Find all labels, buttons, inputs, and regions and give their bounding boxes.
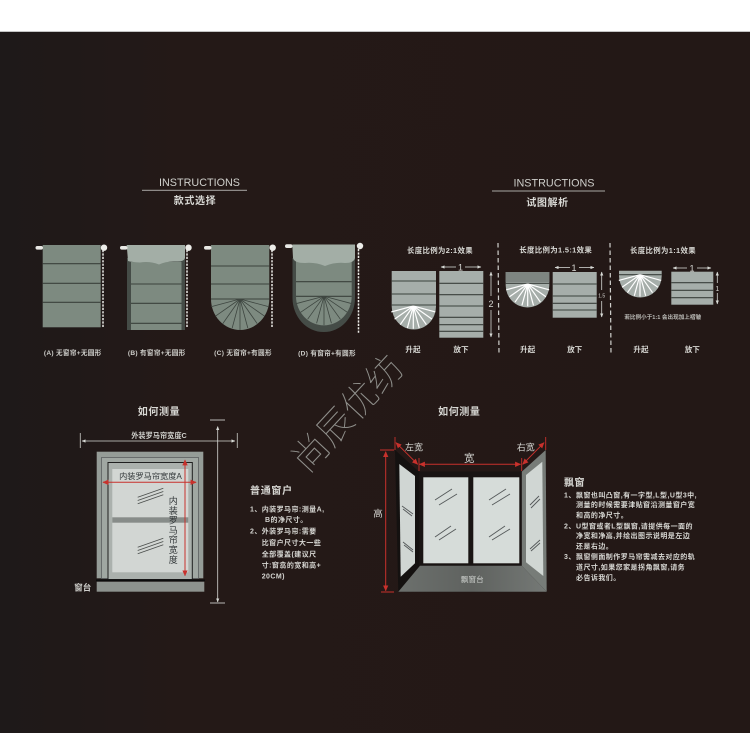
text block: bay window notes: 2、	[564, 524, 576, 530]
outer width dimension: 外装罗马帘宽度C	[131, 431, 187, 440]
text block: bay window notes: 3、	[564, 554, 576, 561]
panel: style A	[36, 244, 107, 328]
text block: standard window notes: 外装罗马帘:需要	[262, 527, 317, 536]
style captions: (C) 无窗帘+有圆形	[214, 348, 272, 357]
window sill	[74, 580, 205, 592]
panel: ratio 1:1	[619, 246, 719, 354]
inner height label: 帘	[169, 534, 178, 545]
inner height label: 马	[169, 525, 178, 535]
text block: bay window notes: 和高的净尺寸。	[576, 510, 628, 520]
text block: standard window notes	[250, 484, 325, 581]
text block: standard window notes: 普通窗户	[250, 484, 293, 497]
text block: standard window notes: 比窗户尺寸大一些	[262, 538, 321, 547]
heading: how to measure, bay window: 如何测量	[438, 405, 481, 418]
panel: ratio 2:1: 放下	[453, 344, 469, 354]
red measure lines	[380, 437, 546, 592]
panel: ratio 1:1: 升起	[633, 344, 649, 354]
inner height label: 度	[169, 554, 178, 565]
panel: ratio 1.5:1: 1	[571, 263, 577, 273]
style captions: (A) 无窗帘+无圆形	[44, 348, 102, 357]
style captions	[44, 348, 356, 358]
glass reflections	[402, 489, 540, 552]
panel: ratio 1:1: 1	[689, 263, 695, 273]
panel: ratio 1:1: 放下	[685, 344, 700, 354]
outer width dimension	[80, 431, 237, 448]
inner height label: 罗	[169, 516, 178, 526]
panel: ratio 1.5:1: 升起	[520, 344, 536, 354]
text block: bay window notes: 飘窗也叫凸窗,有一字型,L型,U型3中,	[576, 490, 697, 500]
measure labels: 宽	[464, 452, 475, 464]
inner width label: 内装罗马帘宽度A	[119, 471, 182, 481]
text block: bay window notes	[564, 476, 697, 582]
inner height label: 内	[169, 495, 178, 506]
measure labels: 右宽	[517, 441, 535, 452]
watermark: 尚辰优纺	[277, 341, 414, 482]
diagram: standard window	[74, 420, 237, 603]
measure labels	[373, 441, 535, 520]
column dividers	[498, 243, 611, 355]
inner height label: 宽	[169, 544, 178, 555]
panel: ratio 2:1: 2	[488, 299, 494, 309]
text block: standard window notes: 20CM)	[262, 574, 285, 581]
panel: ratio 1:1: 1	[715, 286, 719, 293]
text block: bay window notes: 还是右边。	[576, 542, 613, 550]
panel: ratio 1.5:1: 长度比例为1.5:1效果	[519, 246, 592, 254]
inner height label: 装	[169, 505, 178, 516]
heading: style selection: 款式选择	[174, 194, 216, 207]
centre glass panes	[423, 477, 519, 563]
window frame and glass	[97, 452, 203, 580]
heading: diagram explanation: 试图解析	[526, 196, 569, 209]
panel: style D	[285, 243, 363, 334]
sill label: 飘窗台	[461, 574, 484, 584]
heading: diagram explanation: INSTRUCTIONS	[514, 177, 594, 189]
measure labels: 左宽	[405, 442, 423, 452]
panel: ratio 1.5:1	[506, 246, 605, 354]
panel: style C	[204, 244, 276, 330]
panel: ratio 1:1: 长度比例为1:1效果	[630, 246, 696, 255]
measure labels: 高	[373, 508, 383, 520]
text block: bay window notes: 飘窗	[564, 476, 585, 489]
heading: style selection	[142, 177, 247, 207]
text block: bay window notes: 飘窗侧面制作罗马帘需减去对应的轨	[576, 552, 695, 561]
window walls	[395, 450, 547, 592]
text block: bay window notes: 测量的时候需要津贴窗沿测量窗户宽	[576, 500, 695, 509]
panel: ratio 2:1	[391, 246, 494, 354]
text block: bay window notes: U型窗或者L型飘窗,请提供每一面的	[576, 522, 693, 530]
panel: ratio 2:1: 升起	[405, 344, 421, 354]
panel: style B	[120, 244, 192, 330]
side glass panes	[399, 462, 543, 577]
panel: ratio 1.5:1: 放下	[567, 344, 583, 354]
diagram: bay window	[373, 437, 547, 592]
panel: ratio 1:1: 若比例小于1:1 会出现加上褶皱	[624, 313, 701, 321]
text block: standard window notes: 内装罗马帘:测量A,	[262, 504, 325, 514]
panel: ratio 2:1: 长度比例为2:1效果	[407, 246, 473, 255]
style captions: (B) 有窗帘+无圆形	[128, 348, 186, 357]
panel: ratio 2:1: 1	[458, 262, 463, 272]
panel: ratio 1.5:1: 1.5	[598, 294, 605, 300]
style captions: (D) 有窗帘+有圆形	[298, 348, 356, 358]
text block: bay window notes: 1、	[564, 492, 576, 500]
window sill: 窗台	[74, 582, 91, 592]
text block: standard window notes: 2、	[250, 529, 262, 536]
outer height dimension	[210, 420, 225, 603]
text block: bay window notes: 道尺寸,如果您家是拐角飘窗,请务	[576, 562, 685, 571]
text block: standard window notes: 全部覆盖(建议尺	[262, 549, 317, 558]
red measure arrows	[103, 460, 196, 576]
text block: standard window notes: B的净尺寸。	[265, 515, 308, 524]
text block: standard window notes: 1、	[250, 506, 262, 514]
heading: style selection: INSTRUCTIONS	[159, 177, 240, 189]
text block: bay window notes: 净宽和净高,并绘出图示说明是左边	[576, 531, 690, 540]
text block: bay window notes: 必告诉我们。	[576, 573, 621, 582]
heading: how to measure, standard window: 如何测量	[138, 405, 180, 418]
text block: standard window notes: 寸:窗翕的宽和高+	[262, 561, 321, 570]
heading: diagram explanation	[492, 177, 605, 209]
